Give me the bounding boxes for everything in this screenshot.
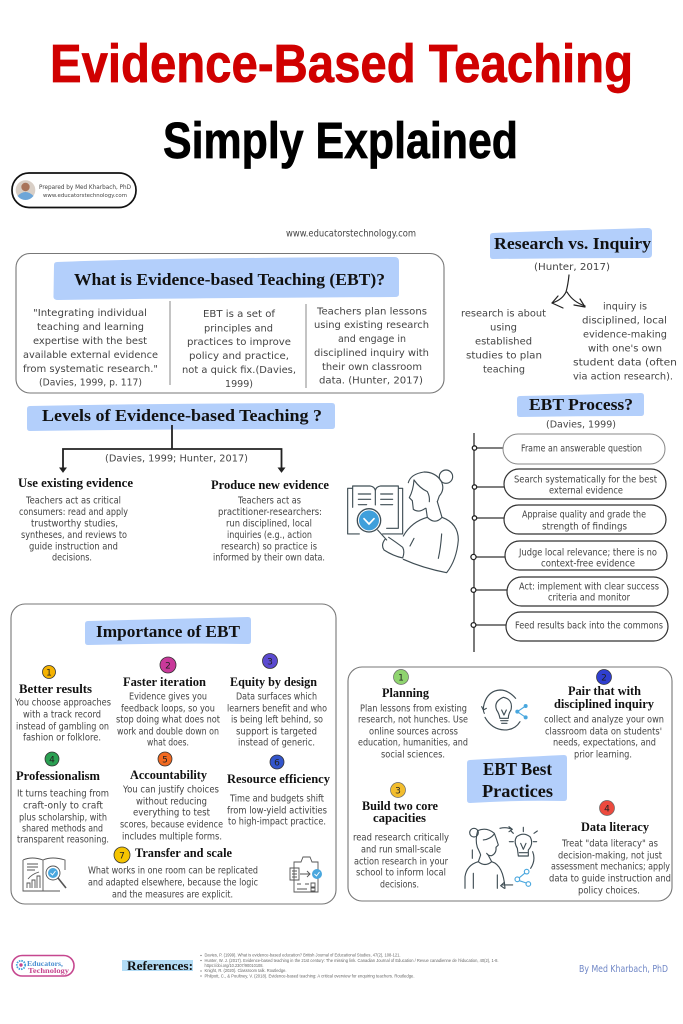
item 5: accountability	[120, 752, 223, 842]
item 3: equity by design: Data surfaces which	[236, 692, 317, 702]
step 2: external evidence	[549, 486, 623, 496]
item 5: accountability: without reducing	[136, 796, 207, 808]
references list	[200, 952, 498, 978]
heading: EBT process: EBT Process?	[529, 395, 633, 414]
text: definition quote: available external evidence	[23, 350, 158, 361]
practice 2: pair with disciplined inquiry: disciplined inquiry	[554, 696, 654, 711]
item 5: accountability: You can justify choices	[122, 784, 219, 796]
logo: Educators Technology: Technology	[28, 966, 69, 975]
item 5: accountability: Accountability	[130, 767, 207, 782]
item 2: faster iteration: Faster iteration	[123, 674, 207, 689]
practice 1: planning: online sources across	[369, 726, 458, 738]
text: definition quote	[23, 308, 158, 388]
text: inquiry: via action research).	[573, 372, 673, 382]
title: Simply Explained	[163, 112, 518, 169]
logo: Educators Technology	[12, 956, 74, 976]
icon: woman with bulb idea cycle	[465, 827, 537, 888]
icon: light bulb with cycle and share	[482, 690, 528, 730]
text: teachers plan lessons: Teachers plan lessons	[316, 306, 427, 318]
text: teachers plan lessons: using existing research	[314, 320, 429, 331]
item 5: accountability: scores, because evidence	[120, 820, 223, 830]
text: principles and practices: principles and	[204, 324, 273, 334]
references list: Knight, R. (2020). Classroom talk. Routledge.	[204, 968, 286, 973]
item 4: professionalism	[16, 752, 109, 846]
heading: levels: Levels of Evidence-based Teaching ?	[42, 406, 322, 425]
heading: EBT best practices: Practices	[482, 781, 553, 801]
branch: produce new evidence	[211, 478, 329, 564]
practice 3: build two core capacities: decisions.	[380, 880, 419, 890]
practice 4: data literacy: policy choices.	[578, 886, 640, 896]
references list: Philpott, C., & Poultney, V. (2018). Evidence-based teaching: A critical overview for enquiring teachers. Routledge.	[204, 974, 414, 978]
item 2: faster iteration: Evidence gives you	[129, 692, 207, 702]
practice 3: build two core capacities: school to inform local	[356, 868, 446, 878]
item 4: professionalism: Professionalism	[16, 768, 100, 783]
branch: use existing evidence	[18, 476, 133, 564]
item 4: professionalism: craft-only to craft	[23, 800, 103, 812]
practice 2: pair with disciplined inquiry: collect and analyze your own	[544, 714, 664, 726]
text: principles and practices	[182, 309, 296, 390]
branch: use existing evidence: trustworthy studies,	[31, 518, 118, 530]
heading: what is EBT	[53, 257, 399, 300]
item 1: better results: with a track record	[23, 710, 101, 720]
practice 1: planning: education, humanities, and	[358, 738, 468, 748]
heading: research vs inquiry	[490, 228, 652, 259]
practice 2: pair with disciplined inquiry: Pair that with	[568, 683, 642, 698]
text: research: using	[490, 322, 517, 334]
author badge: Prepared by Med Kharbach, PhD	[39, 184, 131, 191]
practice 4: data literacy: Treat "data literacy" as	[561, 838, 658, 850]
arrow: split into research and inquiry	[552, 275, 585, 308]
item 7: transfer and scale: and adapted elsewhere, because the logic	[88, 878, 258, 888]
text: principles and practices: policy and practice,	[189, 351, 289, 362]
item 1: better results: You choose approaches	[14, 698, 111, 708]
panel: what is EBT	[16, 254, 444, 393]
panel: levels of EBT	[18, 403, 335, 564]
practice 1: planning: social sciences.	[381, 750, 445, 760]
branch: use existing evidence: decisions.	[52, 552, 92, 564]
text: research: established	[475, 336, 532, 348]
text: principles and practices: not a quick fix.(Davies,	[182, 365, 296, 376]
branch: produce new evidence: Produce new evidence	[211, 478, 329, 492]
item 7: transfer and scale: What works in one room can be replicated	[88, 866, 258, 876]
panel: importance of EBT	[11, 604, 336, 904]
practice 2: pair with disciplined inquiry: classroom data on students'	[545, 726, 662, 738]
text: inquiry: evidence-making	[583, 330, 667, 340]
text: definition quote: "Integrating individual	[33, 308, 147, 319]
panel: research vs inquiry	[461, 228, 677, 382]
panel: EBT best practices	[348, 667, 672, 901]
practice 3: build two core capacities: capacities	[373, 810, 426, 825]
branch: use existing evidence: Use existing evidence	[18, 476, 133, 490]
practice 2: pair with disciplined inquiry: 2	[601, 674, 607, 684]
author badge	[12, 173, 136, 208]
item 6: resource efficiency: 6	[274, 758, 280, 768]
references list: Hunter, W. J. (2017). Evidence-based teaching in the 21st century: The missing link. Canadian Journal of Education / Revue canadienne de l'éducation, 40(2), 1-8.	[204, 958, 498, 963]
branch: produce new evidence: inquiries (e.g., action	[227, 530, 312, 541]
step 5: Act: implement with clear success	[519, 582, 659, 592]
practice 4: data literacy: 4	[604, 804, 610, 814]
heading: research vs inquiry: Research vs. Inquiry	[494, 234, 652, 253]
text: teachers plan lessons: data. (Hunter, 2017)	[319, 376, 423, 386]
practice 1: planning: Plan lessons from existing	[360, 704, 467, 714]
step 3: strength of findings	[542, 522, 627, 532]
text: teachers plan lessons: their own classroom	[322, 362, 422, 373]
item 6: resource efficiency: to high-impact practice.	[228, 816, 326, 828]
icon: clipboard with checklist	[290, 857, 322, 892]
text: definition quote: from systematic research."	[23, 364, 158, 375]
practice 4: data literacy: Data literacy	[581, 819, 649, 834]
practice 4: data literacy: data to guide instruction and	[549, 874, 671, 884]
practice 3: build two core capacities: action research in your	[354, 856, 448, 868]
heading: what is EBT: What is Evidence-based Teaching (EBT)?	[74, 270, 385, 289]
heading: EBT process	[517, 393, 644, 417]
step 1: Frame an answerable question	[521, 444, 642, 454]
step 6	[506, 612, 668, 641]
tree arrows	[60, 425, 284, 472]
item 3: equity by design	[227, 654, 327, 748]
branch: produce new evidence: practitioner-researchers:	[218, 507, 322, 518]
item 7: transfer and scale	[88, 845, 258, 900]
heading: levels	[27, 403, 335, 431]
text: inquiry: student data (often	[573, 358, 677, 368]
item 2: faster iteration	[116, 657, 220, 748]
text: definition quote: expertise with the best	[33, 336, 147, 347]
item 7: transfer and scale: Transfer and scale	[135, 845, 232, 860]
item 4: professionalism: shared methods and	[22, 824, 103, 834]
step 2	[504, 469, 666, 499]
practice 2: pair with disciplined inquiry	[544, 670, 664, 760]
item 5: accountability: 5	[162, 756, 168, 766]
item 1: better results: fashion or folklore.	[23, 732, 101, 744]
item 3: equity by design: 3	[267, 658, 273, 668]
item 6: resource efficiency: from low-yield activities	[227, 806, 327, 816]
item 3: equity by design: learners benefit and who	[227, 704, 327, 714]
item 4: professionalism: plus scholarship, with	[19, 812, 107, 824]
practice 1: planning: Planning	[382, 685, 429, 700]
branch: produce new evidence: research) so practice is	[221, 542, 317, 552]
step 6: Feed results back into the commons	[515, 620, 663, 632]
practice 4: data literacy	[549, 800, 671, 896]
item 2: faster iteration: feedback loops, so you	[121, 704, 215, 714]
references label: References:	[127, 959, 193, 973]
title	[50, 34, 633, 169]
text: research: research is about	[461, 308, 546, 320]
text: inquiry: with one's own	[588, 344, 662, 354]
citation: (Davies, 1999)	[546, 420, 616, 430]
item 1: better results: instead of gambling on	[16, 722, 109, 732]
item 5: accountability: includes multiple forms.	[122, 832, 222, 842]
item 2: faster iteration: work and double down on	[117, 726, 219, 738]
text: research	[461, 308, 546, 376]
step 3	[504, 505, 666, 534]
item 7: transfer and scale: 7	[119, 852, 125, 862]
step 4: context-free evidence	[541, 558, 635, 570]
item 2: faster iteration: what does.	[147, 738, 189, 748]
text: inquiry: inquiry is	[603, 302, 647, 312]
text: research: studies to plan	[466, 350, 542, 362]
text: teachers plan lessons: and engage in	[338, 334, 406, 345]
practice 3: build two core capacities: read research critically	[353, 832, 449, 844]
author badge: www.educatorstechnology.com	[43, 193, 127, 199]
item 2: faster iteration: stop doing what does not	[116, 714, 220, 726]
practice 1: planning	[358, 670, 468, 760]
text: definition quote: teaching and learning	[37, 322, 144, 333]
item 7: transfer and scale: and the measures are explicit.	[112, 890, 233, 900]
branch: produce new evidence: Teachers act as	[237, 496, 301, 506]
references list: Davies, P. (1999). What is evidence-based education? British Journal of Educational Studies, 47(2), 108-121.	[204, 952, 400, 958]
branch: use existing evidence: Teachers act as critical	[25, 496, 121, 506]
practice 3: build two core capacities: and run small-scale	[361, 844, 441, 856]
text: teachers plan lessons	[314, 306, 429, 386]
icon: book with chart and magnifier	[23, 858, 66, 891]
author credit: By Med Kharbach, PhD	[579, 964, 668, 975]
branch: use existing evidence: consumers: read and apply	[19, 507, 128, 518]
branch: use existing evidence: guide instruction and	[29, 542, 118, 552]
practice 1: planning: research, not hunches. Use	[358, 714, 468, 726]
practice 3: build two core capacities	[353, 782, 449, 890]
logo: Educators Technology: Educators,	[27, 959, 63, 968]
item 3: equity by design: Equity by design	[230, 674, 318, 689]
citation: (Hunter, 2017)	[534, 262, 610, 273]
text: teachers plan lessons: disciplined inquiry with	[314, 348, 429, 359]
text: inquiry	[573, 302, 677, 382]
item 3: equity by design: instead of generic.	[238, 738, 315, 748]
item 1: better results: 1	[46, 668, 52, 678]
text: research: teaching	[483, 364, 525, 376]
text: principles and practices: EBT is a set of	[203, 309, 276, 320]
heading: importance: Importance of EBT	[96, 622, 241, 641]
website url: www.educatorstechnology.com	[286, 228, 416, 240]
practice 2: pair with disciplined inquiry: needs, expectations, and	[553, 738, 656, 748]
practice 3: build two core capacities: Build two core	[362, 798, 438, 813]
practice 3: build two core capacities: 3	[395, 786, 401, 796]
branch: produce new evidence: informed by their own data.	[213, 552, 325, 564]
item 5: accountability: everything to test	[133, 808, 210, 818]
item 4: professionalism: It turns teaching from	[17, 788, 109, 800]
item 6: resource efficiency: Resource efficiency	[227, 771, 330, 786]
step 5: criteria and monitor	[548, 592, 630, 604]
text: definition quote: (Davies, 1999, p. 117)	[39, 378, 142, 388]
heading: EBT best practices: EBT Best	[483, 759, 552, 779]
item 4: professionalism: transparent reasoning.	[17, 834, 109, 846]
step 1	[503, 434, 665, 464]
item 1: better results: Better results	[19, 681, 92, 696]
step 2: Search systematically for the best	[514, 474, 657, 486]
panel: EBT process	[471, 393, 668, 652]
text: inquiry: disciplined, local	[582, 316, 667, 326]
item 6: resource efficiency	[227, 755, 330, 828]
timeline	[471, 433, 507, 652]
item 4: professionalism: 4	[49, 756, 55, 766]
step 4	[505, 541, 667, 570]
heading: importance	[85, 617, 251, 645]
icon: woman reading book with magnifier	[348, 470, 458, 573]
step 4: Judge local relevance; there is no	[518, 548, 657, 558]
step 5	[507, 577, 668, 606]
branch: produce new evidence: run disciplined, local	[226, 518, 312, 530]
branch: use existing evidence: syntheses, and reviews to	[21, 530, 127, 541]
item 3: equity by design: is being left behind, so	[231, 714, 323, 726]
practice 4: data literacy: decision-making, not just	[558, 850, 662, 862]
text: principles and practices: 1999)	[225, 379, 253, 390]
practice 1: planning: 1	[398, 674, 404, 684]
item 3: equity by design: support is targeted	[236, 726, 317, 738]
heading: EBT best practices	[467, 755, 567, 803]
item 6: resource efficiency: Time and budgets shift	[229, 794, 324, 804]
citation: (Davies, 1999; Hunter, 2017)	[105, 454, 248, 464]
references list: https://doi.org/10.2307/90010108.	[204, 963, 264, 968]
item 2: faster iteration: 2	[165, 662, 171, 672]
item 1: better results	[14, 666, 111, 744]
practice 2: pair with disciplined inquiry: prior learning.	[574, 750, 632, 760]
step 3: Appraise quality and grade the	[522, 510, 646, 520]
text: principles and practices: practices to improve	[187, 337, 291, 348]
